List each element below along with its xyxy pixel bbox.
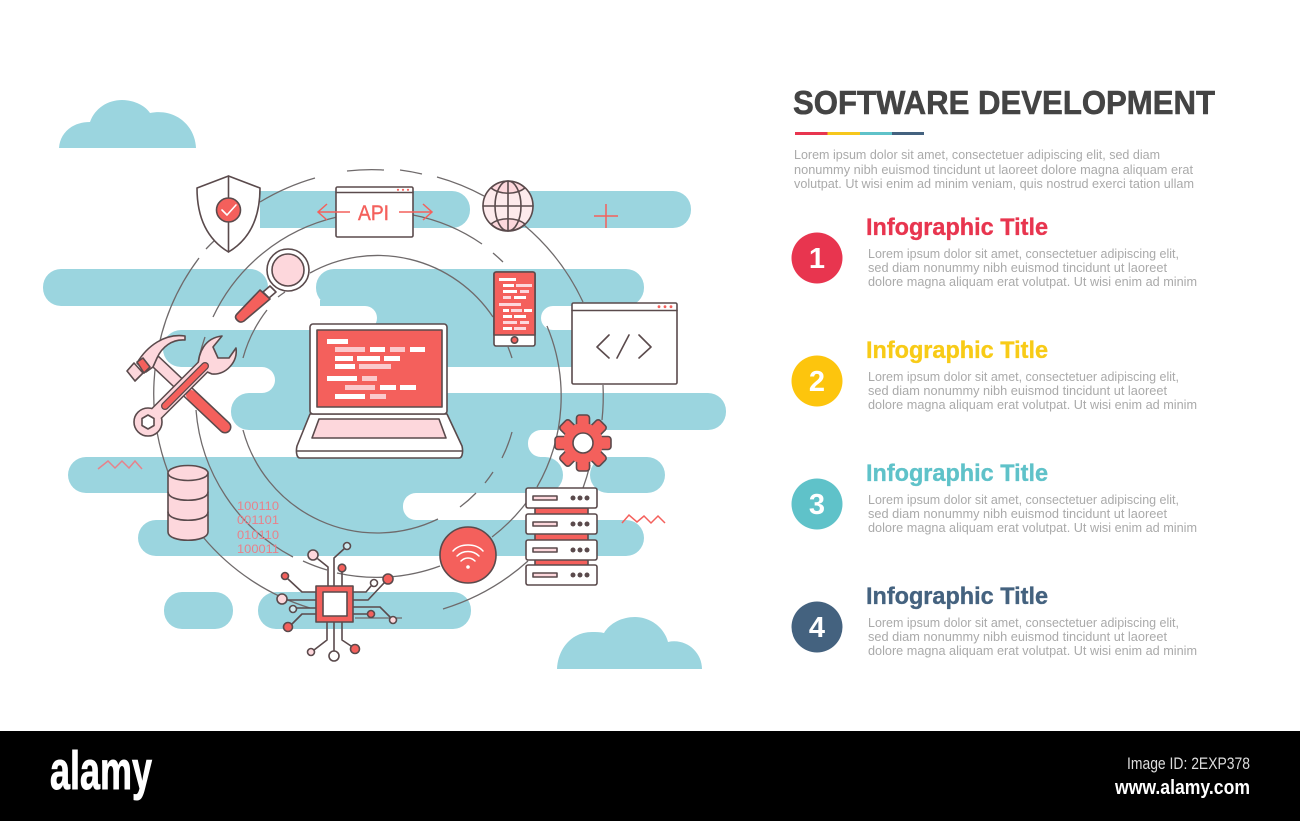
icon: wifi	[440, 527, 496, 583]
item 2: sed diam nonummy nibh euismod tincidunt ut laoreet	[868, 384, 1168, 398]
item 4: 4	[809, 612, 825, 644]
code lines on laptop screen	[327, 339, 425, 399]
item 1: Lorem ipsum dolor sit amet, consectetuer adipiscing elit,	[868, 247, 1179, 261]
heading: SOFTWARE DEVELOPMENT	[793, 84, 1215, 121]
item 4: Lorem ipsum dolor sit amet, consectetuer adipiscing elit,	[868, 616, 1179, 630]
icon: phone	[494, 272, 535, 346]
item 1: 1	[809, 243, 825, 275]
item 1: dolore magna aliquam erat volutpat. Ut wisi enim ad minim	[868, 275, 1197, 289]
icon: shield	[197, 176, 260, 252]
binary digits: 010110	[237, 528, 279, 542]
icon: code window	[572, 303, 677, 384]
zigzag left	[98, 461, 142, 469]
icon: API window	[318, 187, 432, 237]
intro paragraph	[794, 148, 1194, 191]
item 2: dolore magna aliquam erat volutpat. Ut wisi enim ad minim	[868, 398, 1197, 412]
item 4: Infographic Title	[866, 583, 1048, 610]
background bars	[43, 191, 748, 629]
footer band: alamy	[50, 741, 152, 801]
item 2: Lorem ipsum dolor sit amet, consectetuer adipiscing elit,	[868, 370, 1179, 384]
item 3: 3	[809, 489, 825, 521]
item 4: dolore magna aliquam erat volutpat. Ut wisi enim ad minim	[868, 644, 1197, 658]
icon: laptop	[296, 324, 463, 458]
footer band: www.alamy.com	[1114, 777, 1250, 799]
footer band: Image ID: 2EXP378	[1127, 754, 1250, 773]
intro paragraph: nonummy nibh euismod tincidunt ut laoreet dolore magna aliquam erat	[794, 163, 1194, 177]
cloud top left	[59, 100, 196, 148]
item 1: Infographic Title	[866, 214, 1048, 241]
icon: database	[168, 466, 208, 540]
item 1: sed diam nonummy nibh euismod tincidunt ut laoreet	[868, 261, 1168, 275]
item 2: 2	[809, 366, 825, 398]
cloud bottom right	[557, 617, 702, 669]
icon: hammer and wrench	[127, 336, 236, 436]
item 1	[792, 214, 1197, 289]
binary digits: 100110	[237, 499, 279, 513]
icon: gear	[555, 415, 611, 471]
panel: illustration	[43, 100, 748, 669]
binary digits: 001101	[237, 513, 279, 527]
item 2	[792, 337, 1197, 412]
icon: globe	[483, 181, 533, 231]
intro paragraph: Lorem ipsum dolor sit amet, consectetuer adipiscing elit, sed diam	[794, 148, 1160, 162]
intro paragraph: volutpat. Ut wisi enim ad minim veniam, quis nostrud exerci tation ullam	[794, 177, 1194, 191]
item 3	[792, 460, 1197, 535]
item 3: sed diam nonummy nibh euismod tincidunt ut laoreet	[868, 507, 1168, 521]
icon: plus mark	[594, 204, 618, 228]
item 3: Lorem ipsum dolor sit amet, consectetuer adipiscing elit,	[868, 493, 1179, 507]
icon: magnifier	[236, 249, 309, 322]
zigzag right	[622, 515, 665, 523]
orbit rings	[154, 170, 603, 618]
icon: API window: API	[358, 202, 389, 225]
binary digits: 100011	[237, 542, 279, 556]
item 4: sed diam nonummy nibh euismod tincidunt ut laoreet	[868, 630, 1168, 644]
item 4	[792, 583, 1197, 658]
item 2: Infographic Title	[866, 337, 1048, 364]
icon: microchip	[277, 542, 396, 661]
footer band	[0, 731, 1300, 821]
item 3: dolore magna aliquam erat volutpat. Ut wisi enim ad minim	[868, 521, 1197, 535]
item 3: Infographic Title	[866, 460, 1048, 487]
heading colour rule	[795, 132, 924, 135]
icon: server rack	[526, 488, 597, 585]
binary digits	[237, 499, 279, 556]
